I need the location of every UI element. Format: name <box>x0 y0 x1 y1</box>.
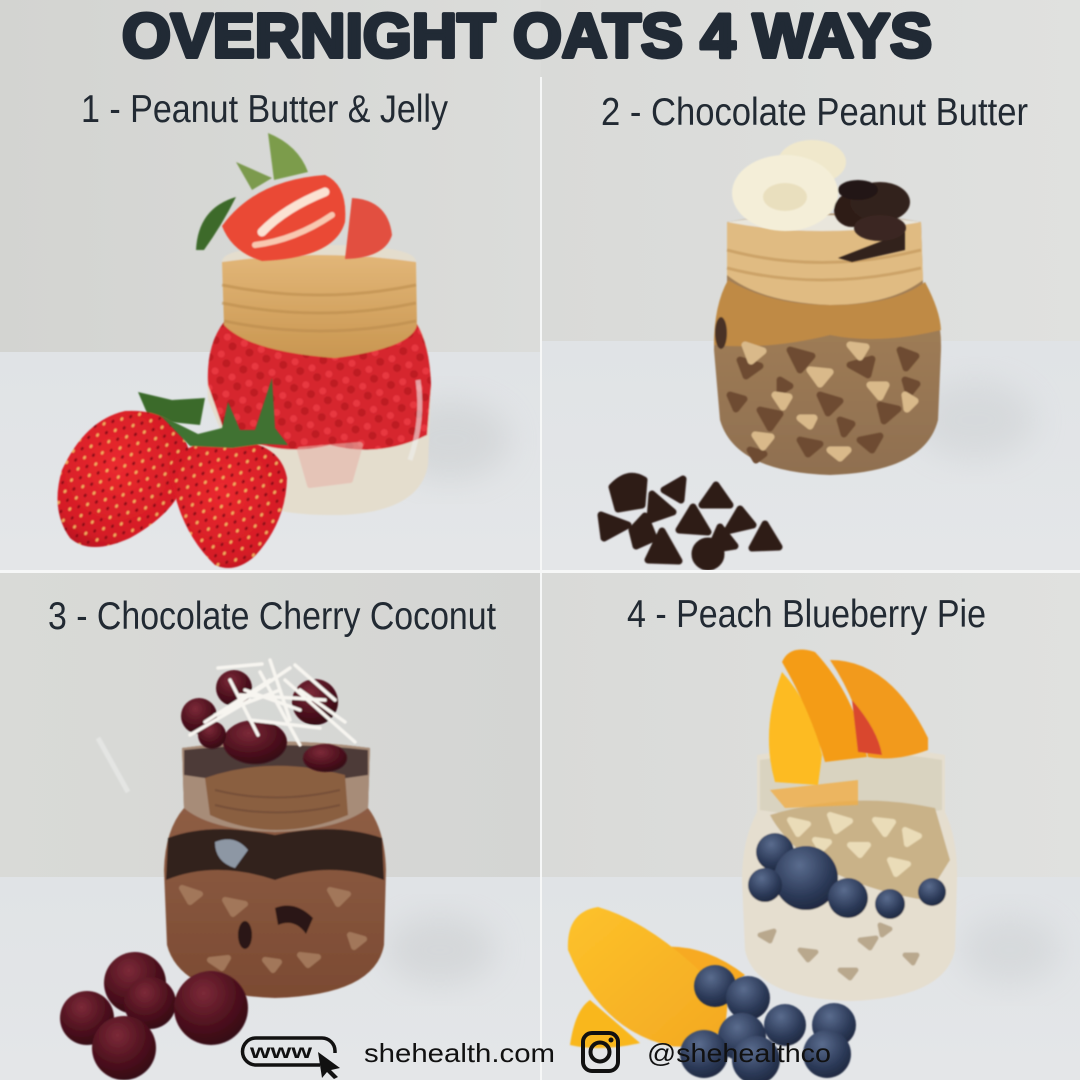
peach slices <box>568 907 745 1048</box>
chocolate chips <box>601 476 779 567</box>
blueberries <box>680 965 856 1080</box>
jar: peanut butter and jelly <box>208 245 431 515</box>
heading: peach blueberry pie: 4 - Peach Blueberry Pie <box>627 593 986 636</box>
panel: chocolate peanut butter <box>541 0 1080 571</box>
toppings: cherries and coconut <box>181 660 355 772</box>
icon: www cursor: www <box>249 1042 312 1063</box>
panel: chocolate cherry coconut <box>0 571 541 1080</box>
heading: chocolate cherry coconut: 3 - Chocolate Cherry Coconut <box>48 595 496 638</box>
cherries <box>60 952 248 1080</box>
icon: www cursor <box>242 1038 340 1079</box>
heading: chocolate peanut butter: 2 - Chocolate Peanut Butter <box>601 91 1028 134</box>
website text: shehealth.com <box>364 1038 555 1068</box>
strawberry: right <box>160 378 288 568</box>
panel: peanut butter and jelly <box>0 0 541 571</box>
jar: peach blueberry pie <box>742 746 957 1001</box>
peach slices on jar <box>769 650 928 808</box>
strawberry: left <box>58 392 205 547</box>
strawberry slices on jar <box>196 133 392 261</box>
jar: chocolate cherry coconut <box>164 742 386 998</box>
heading: peanut butter and jelly: 1 - Peanut Butter & Jelly <box>81 88 448 131</box>
toppings: banana and chocolate <box>732 140 910 262</box>
icon: instagram <box>583 1033 618 1071</box>
title: OVERNIGHT OATS 4 WAYS <box>122 2 932 71</box>
footer: website and instagram <box>242 1033 831 1079</box>
panel: peach blueberry pie <box>541 571 1080 1080</box>
instagram handle: @shehealthco <box>647 1038 831 1068</box>
jar: chocolate peanut butter <box>714 214 941 475</box>
